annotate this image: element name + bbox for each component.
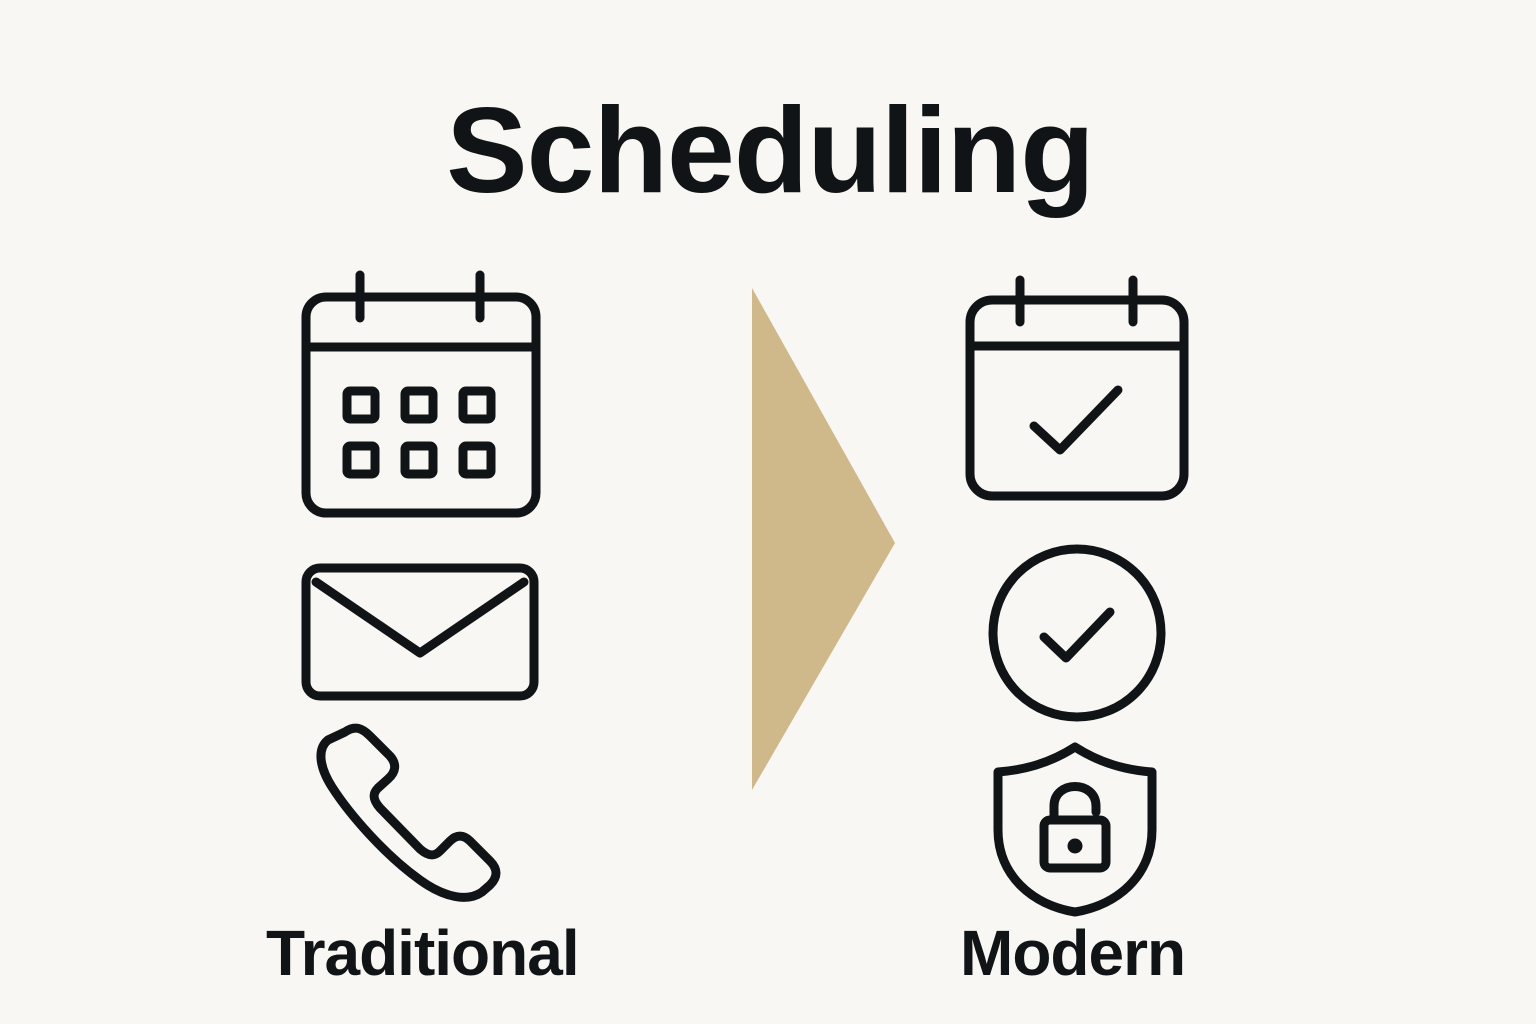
label: traditional: Traditional bbox=[266, 917, 579, 989]
arrow: transition bbox=[752, 288, 895, 790]
icon: phone bbox=[321, 728, 496, 897]
icon: envelope bbox=[306, 568, 534, 696]
icon: shield with lock bbox=[998, 747, 1152, 912]
title: Scheduling bbox=[446, 82, 1094, 218]
icon: check circle bbox=[993, 549, 1161, 717]
icon: traditional calendar bbox=[306, 275, 536, 513]
icon: modern calendar with check bbox=[970, 280, 1184, 496]
label: modern: Modern bbox=[960, 917, 1185, 989]
